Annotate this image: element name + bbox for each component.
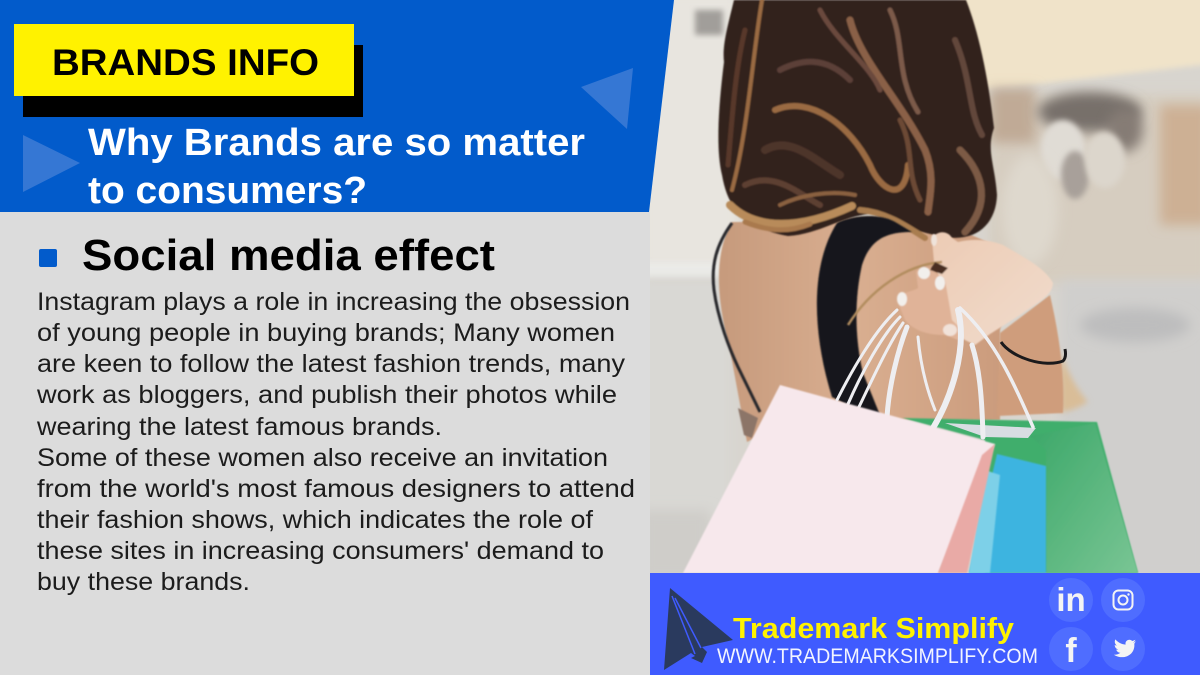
finger nails <box>918 267 930 279</box>
black top straps <box>713 216 912 415</box>
decorative triangle left <box>23 135 80 192</box>
icon: twitter <box>1101 627 1145 671</box>
panel: footer branding <box>650 573 1200 675</box>
forearm <box>997 295 1063 416</box>
inner white bag <box>945 423 1036 438</box>
icon: linkedin <box>1049 578 1093 622</box>
green bag <box>902 418 1138 573</box>
heading: Why Brands are so matter <box>88 122 585 164</box>
hair strand in hand <box>848 262 942 325</box>
body text: Instagram plays a role in increasing the obsession <box>37 288 630 316</box>
photo background street <box>640 0 1200 580</box>
bracelet <box>1001 342 1066 363</box>
body text: buy these brands. <box>37 568 250 596</box>
brand name: Trademark Simplify <box>733 613 1014 645</box>
green bag front fold <box>1046 424 1138 573</box>
blond hair ends by arm <box>1060 350 1088 412</box>
decorative triangle right <box>581 68 633 129</box>
photo: woman carrying shopping bags <box>640 0 1200 580</box>
panel: social media effect <box>0 212 650 675</box>
body text: from the world's most famous designers to attend <box>37 475 635 503</box>
body text: are keen to follow the latest fashion trends, many <box>37 350 626 378</box>
light blue bag edge <box>969 470 1000 573</box>
body text: Some of these women also receive an invitation <box>37 444 608 472</box>
website url: WWW.TRADEMARKSIMPLIFY.COM <box>717 645 1038 668</box>
badge: brands info <box>14 24 363 117</box>
bullet square <box>39 249 57 267</box>
bag handles behind hand <box>837 310 935 417</box>
body text: wearing the latest famous brands. <box>36 413 442 441</box>
body text: their fashion shows, which indicates the role of <box>37 506 593 534</box>
hair highlights <box>728 0 982 238</box>
section heading: Social media effect <box>82 231 495 280</box>
body text: work as bloggers, and publish their photos while <box>36 381 617 409</box>
body text <box>36 288 635 596</box>
pink bag <box>683 385 995 573</box>
body text: of young people in buying brands; Many women <box>37 319 615 347</box>
tattoo <box>738 408 758 438</box>
blue bag <box>969 454 1046 573</box>
icon: linkedin: in <box>1056 581 1086 618</box>
icon: instagram <box>1101 578 1145 622</box>
bag handles in front <box>933 308 1033 437</box>
hand and fingers <box>848 232 1053 345</box>
pink bag side <box>938 444 995 573</box>
icon: paper plane logo <box>664 588 733 670</box>
heading <box>88 122 585 212</box>
badge: brands info: BRANDS INFO <box>52 42 319 83</box>
hair <box>718 0 997 238</box>
panel: blue header <box>0 0 674 212</box>
heading: to consumers? <box>88 170 367 212</box>
icon: facebook <box>1049 627 1093 671</box>
icon: facebook: f <box>1065 632 1077 670</box>
body text: these sites in increasing consumers' demand to <box>37 537 604 565</box>
bare back <box>719 215 1020 442</box>
